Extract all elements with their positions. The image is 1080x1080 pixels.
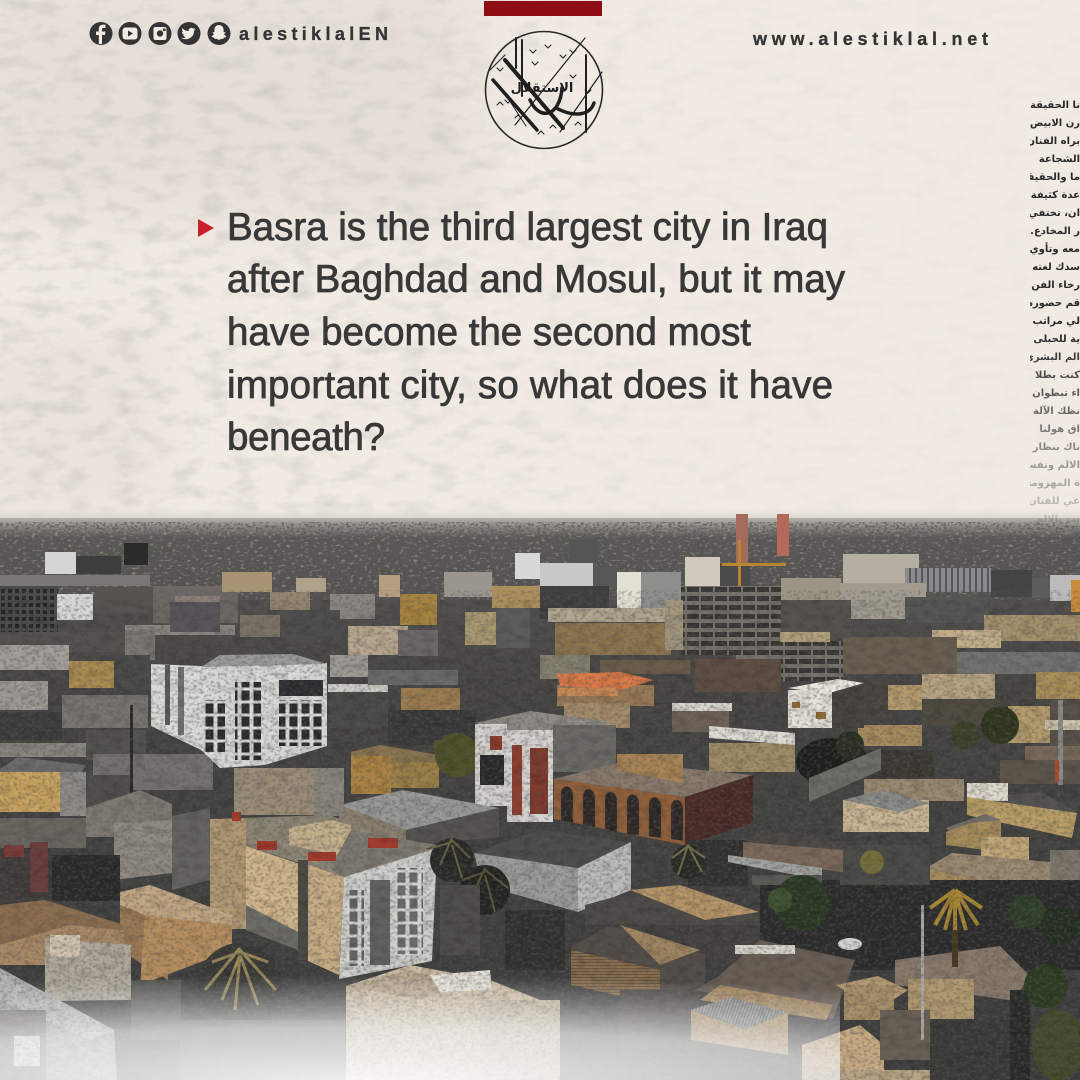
newspaper column: اء تبطوان (1032, 388, 1080, 399)
newspaper column: نت بالالم (1036, 514, 1080, 525)
newspaper column: لي مراتب (1032, 316, 1080, 327)
newspaper column: الشجاعة (1039, 154, 1080, 165)
tan house left (120, 885, 232, 985)
texture overlay (0, 590, 1080, 1080)
palm tree right (930, 890, 982, 967)
city photograph (0, 514, 1080, 1080)
newspaper column: ية للحبلى (1033, 334, 1080, 345)
grey building centre (339, 790, 631, 912)
bottom fog (0, 975, 840, 1080)
awning building (728, 830, 843, 885)
red water tanks (232, 812, 398, 861)
newspaper column: رن الابيض (1030, 118, 1080, 129)
city base (0, 518, 1080, 1080)
light tan building bottom (346, 965, 560, 1080)
newspaper column: نا الحقيقة (1030, 100, 1080, 111)
main text: after Baghdad and Mosul, but it may (227, 258, 846, 301)
icon: instagram (148, 22, 172, 45)
newspaper column: كنت بطلا (1035, 370, 1080, 381)
antenna right (1055, 700, 1063, 785)
far buildings left (0, 543, 540, 656)
website: www.alestiklal.net (752, 29, 988, 49)
main text (227, 206, 846, 459)
yellow building left (0, 757, 130, 816)
brown rooftops left (0, 900, 181, 1040)
grey building bottom-left (0, 968, 117, 1080)
far buildings right (540, 539, 1080, 699)
white curved building (788, 679, 864, 728)
far city texture (0, 522, 1080, 600)
paper background (0, 0, 1080, 530)
road and lower right ground (688, 840, 1080, 970)
arched brick building (554, 754, 753, 845)
tall lamp post (921, 905, 924, 1040)
palms centre (430, 838, 565, 970)
newspaper column: رخاء الفن (1031, 280, 1080, 291)
trees right (671, 845, 1080, 1080)
icon: facebook (90, 22, 112, 45)
main text: important city, so what does it have (227, 364, 833, 407)
social icons (90, 22, 230, 45)
left mid rooftops (0, 768, 344, 901)
skeleton building (665, 586, 851, 692)
orange roof building (557, 672, 654, 696)
cranes (722, 514, 789, 590)
red and white building (475, 711, 615, 822)
icon: youtube (118, 22, 142, 45)
yellow building centre (351, 733, 479, 794)
mid blocks right (540, 655, 1080, 778)
main text: Basra is the third largest city in Iraq (227, 206, 828, 249)
low-rise brown blocks (571, 885, 759, 1050)
tan apartment building (210, 812, 437, 979)
newspaper column: معه وتأوي (1030, 244, 1080, 255)
icon: twitter (178, 22, 200, 45)
house lower right (802, 976, 1030, 1080)
newspaper column: ناك بنظار (1033, 442, 1080, 453)
main text: have become the second most (227, 311, 751, 354)
palm bottom (180, 943, 345, 1080)
red top bar (484, 1, 602, 16)
bullet arrow (198, 219, 214, 237)
rubble yard (895, 946, 1029, 1001)
dark tree cluster (796, 706, 1019, 786)
newspaper column: اق هولنا (1039, 424, 1080, 435)
brand handle: alestiklalEN (239, 24, 388, 44)
shanty roofs centre-right (691, 940, 855, 1055)
car (838, 938, 862, 950)
newspaper column (1030, 100, 1080, 524)
white office building (151, 654, 327, 768)
newspaper column: نظك الآلة (1033, 406, 1080, 417)
newspaper column: سدك لغته (1032, 262, 1080, 273)
logo seal (486, 32, 602, 148)
main text: beneath? (227, 416, 385, 459)
mid blocks left (0, 630, 476, 815)
logo seal: الاستقلال (511, 81, 573, 96)
right mid rooftops (809, 720, 1080, 910)
icon: snapchat (208, 22, 230, 45)
